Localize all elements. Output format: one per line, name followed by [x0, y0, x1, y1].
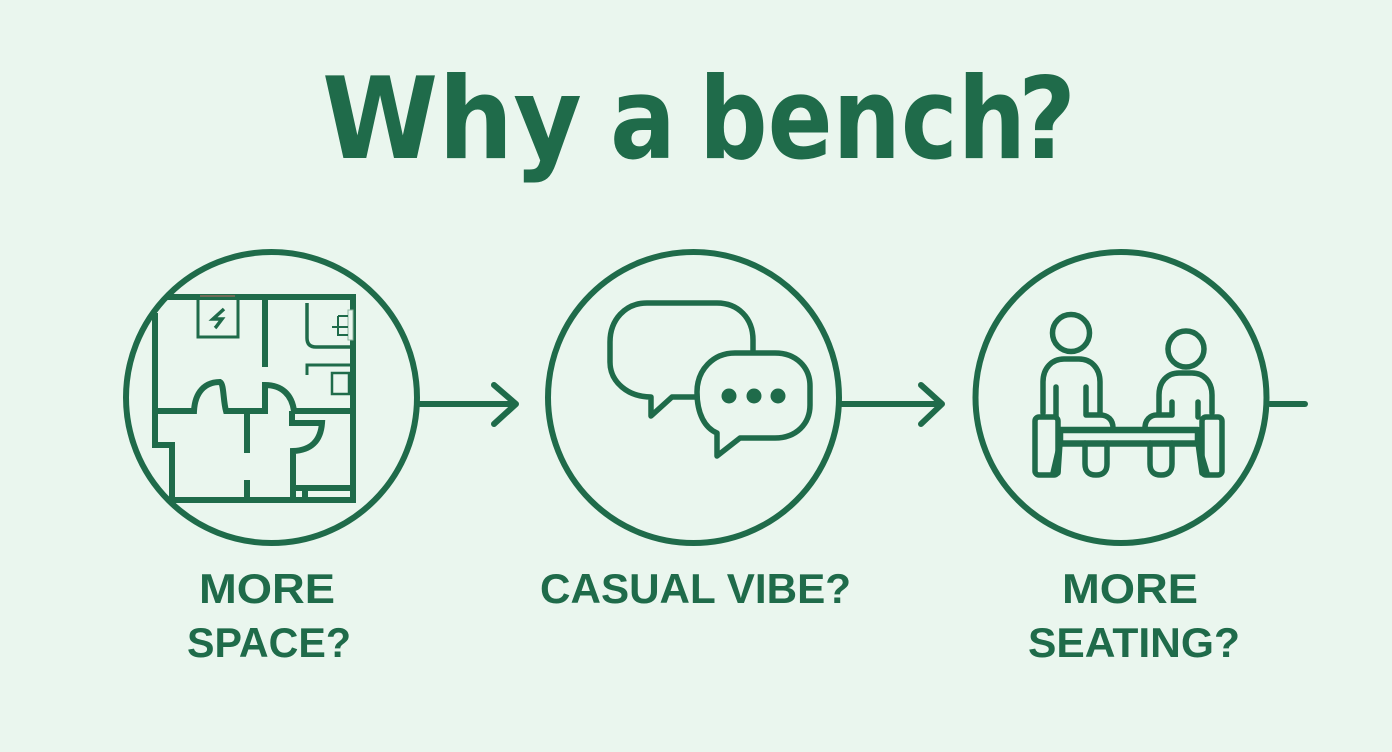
- panel: more space: [126, 252, 516, 543]
- icon: speech bubbles: [610, 303, 810, 456]
- title: Why: [322, 53, 582, 185]
- title: a: [610, 53, 676, 185]
- icon: floor plan: [155, 296, 353, 500]
- label: more space: SPACE?: [187, 619, 351, 666]
- circle: more space: [126, 252, 417, 543]
- panel: more seating: [976, 252, 1305, 543]
- arrow: vibe to seating: [842, 385, 942, 424]
- connector stub: [1270, 401, 1305, 407]
- circle: more seating: [976, 252, 1266, 543]
- icon: two people on a bench: [1035, 314, 1222, 475]
- title: bench: [699, 53, 1026, 185]
- label: casual vibe: CASUAL VIBE?: [540, 565, 851, 612]
- panel: casual vibe: [548, 252, 942, 543]
- title: [322, 53, 1076, 185]
- label: more seating: SEATING?: [1028, 619, 1240, 666]
- label: more seating: MORE: [1062, 565, 1198, 612]
- label: more space: MORE: [199, 565, 335, 612]
- circle: casual vibe: [548, 252, 839, 543]
- arrow: space to vibe: [420, 385, 516, 424]
- title: ?: [1018, 53, 1076, 185]
